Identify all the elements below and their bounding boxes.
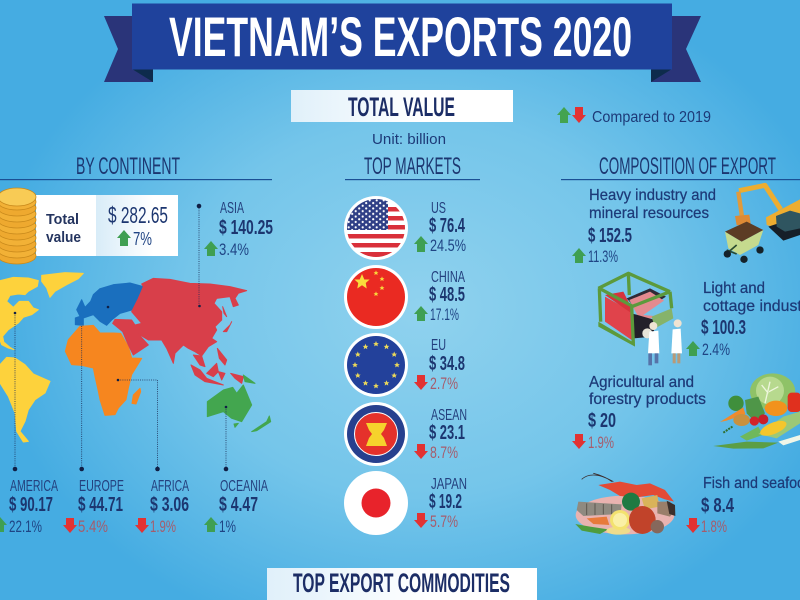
heading: total value <box>291 90 513 122</box>
stat: europe: 5.4% <box>78 517 108 536</box>
stat: China: 17.1% <box>430 305 459 324</box>
stat: america: 22.1% <box>9 517 42 536</box>
stat: europe: $ 44.71 <box>78 494 123 516</box>
stat: China: $ 48.5 <box>429 284 465 306</box>
stat: africa <box>135 478 189 536</box>
flag: US <box>344 196 408 260</box>
stat: ASEAN <box>414 407 467 462</box>
stat: US: $ 76.4 <box>429 215 466 237</box>
stat: ASEAN: ASEAN <box>431 407 467 424</box>
legend: compared to 2019: Compared to 2019 <box>592 109 711 126</box>
icon: seafood plate <box>575 473 675 535</box>
stat: US <box>414 200 466 255</box>
stat: heavy industry: Heavy industry and <box>589 187 716 204</box>
stat: america: AMERICA <box>10 478 58 495</box>
america <box>0 273 83 442</box>
asia <box>113 278 247 385</box>
stat: america <box>0 478 58 536</box>
stat: light and cottage industry: $ 100.3 <box>701 317 746 339</box>
stat: heavy industry: $ 152.5 <box>588 225 632 247</box>
stat: america: $ 90.17 <box>9 494 53 516</box>
stat: US: 24.5% <box>430 236 466 255</box>
stat: ASEAN: $ 23.1 <box>429 422 465 444</box>
icon: coin stack <box>0 188 36 264</box>
stat: China: CHINA <box>431 269 465 286</box>
stat: ASEAN: 8.7% <box>430 443 458 462</box>
stat: africa: 1.9% <box>150 517 176 536</box>
stat: oceania: OCEANIA <box>220 478 268 495</box>
stat: agricultural and forestry: $ 20 <box>588 410 616 432</box>
stat: EU: EU <box>431 337 446 354</box>
total value box: Total <box>46 211 79 228</box>
heading: top markets <box>345 153 480 180</box>
heading: top export commodities: TOP EXPORT COMMODITIES <box>293 568 510 598</box>
stat: Japan: $ 19.2 <box>429 491 462 513</box>
flag: China <box>344 265 408 329</box>
title banner <box>104 4 701 82</box>
stat: europe <box>63 478 124 536</box>
heading: total value: TOTAL VALUE <box>348 92 455 122</box>
stat: agricultural and forestry <box>572 374 706 452</box>
stat: light and cottage industry: 2.4% <box>702 340 730 359</box>
stat: heavy industry: mineral resources <box>589 205 709 222</box>
flag: Japan <box>344 471 408 535</box>
stat: light and cottage industry <box>686 280 800 359</box>
stat: EU <box>414 337 465 393</box>
africa <box>65 325 142 415</box>
heading: by continent: BY CONTINENT <box>76 153 180 180</box>
heading: top markets: TOP MARKETS <box>364 153 461 180</box>
stat: US: US <box>431 200 446 217</box>
europe <box>75 283 143 325</box>
stat: europe: EUROPE <box>79 478 124 495</box>
stat: fish and seafood: 1.8% <box>701 517 727 536</box>
stat: agricultural and forestry: Agricultural and <box>589 374 694 391</box>
stat: Japan <box>414 476 467 531</box>
icon: textile machine with workers <box>598 273 682 365</box>
stat: agricultural and forestry: forestry products <box>589 391 706 408</box>
total value box: 7% <box>133 229 152 249</box>
stat: fish and seafood: $ 8.4 <box>701 495 735 517</box>
stat: asia: 3.4% <box>219 240 249 259</box>
world map <box>0 273 271 442</box>
stat: Japan: JAPAN <box>431 476 467 493</box>
stat: oceania: 1% <box>219 517 236 536</box>
stat: Japan: 5.7% <box>430 512 458 531</box>
stat: asia: ASIA <box>220 200 244 217</box>
total value box <box>36 195 178 256</box>
stat: EU: 2.7% <box>430 374 458 393</box>
icon: vegetables <box>713 373 800 449</box>
stat: africa: $ 3.06 <box>150 494 189 516</box>
stat: africa: AFRICA <box>151 478 189 495</box>
stat: asia <box>204 200 273 259</box>
stat: light and cottage industry: Light and <box>703 280 765 297</box>
flag: EU <box>344 333 408 397</box>
flag: ASEAN <box>344 402 408 466</box>
legend: compared to 2019 <box>557 107 711 126</box>
map leader lines <box>15 206 226 469</box>
stat: China <box>414 269 465 324</box>
stat: fish and seafood <box>686 475 800 536</box>
map leader dots <box>13 204 228 471</box>
stat: EU: $ 34.8 <box>429 353 465 375</box>
total value box: value <box>46 229 81 246</box>
stat: oceania <box>204 478 268 536</box>
stat: heavy industry: 11.3% <box>588 247 618 266</box>
stat: asia: $ 140.25 <box>219 217 273 239</box>
total value box: $ 282.65 <box>108 202 168 228</box>
oceania <box>207 375 271 432</box>
stat: agricultural and forestry: 1.9% <box>588 433 614 452</box>
heading: top export commodities <box>267 568 537 600</box>
stat: heavy industry <box>572 187 716 266</box>
unit note: Unit: billion <box>372 131 446 148</box>
stat: oceania: $ 4.47 <box>219 494 258 516</box>
icon: excavator and cart <box>724 185 800 263</box>
